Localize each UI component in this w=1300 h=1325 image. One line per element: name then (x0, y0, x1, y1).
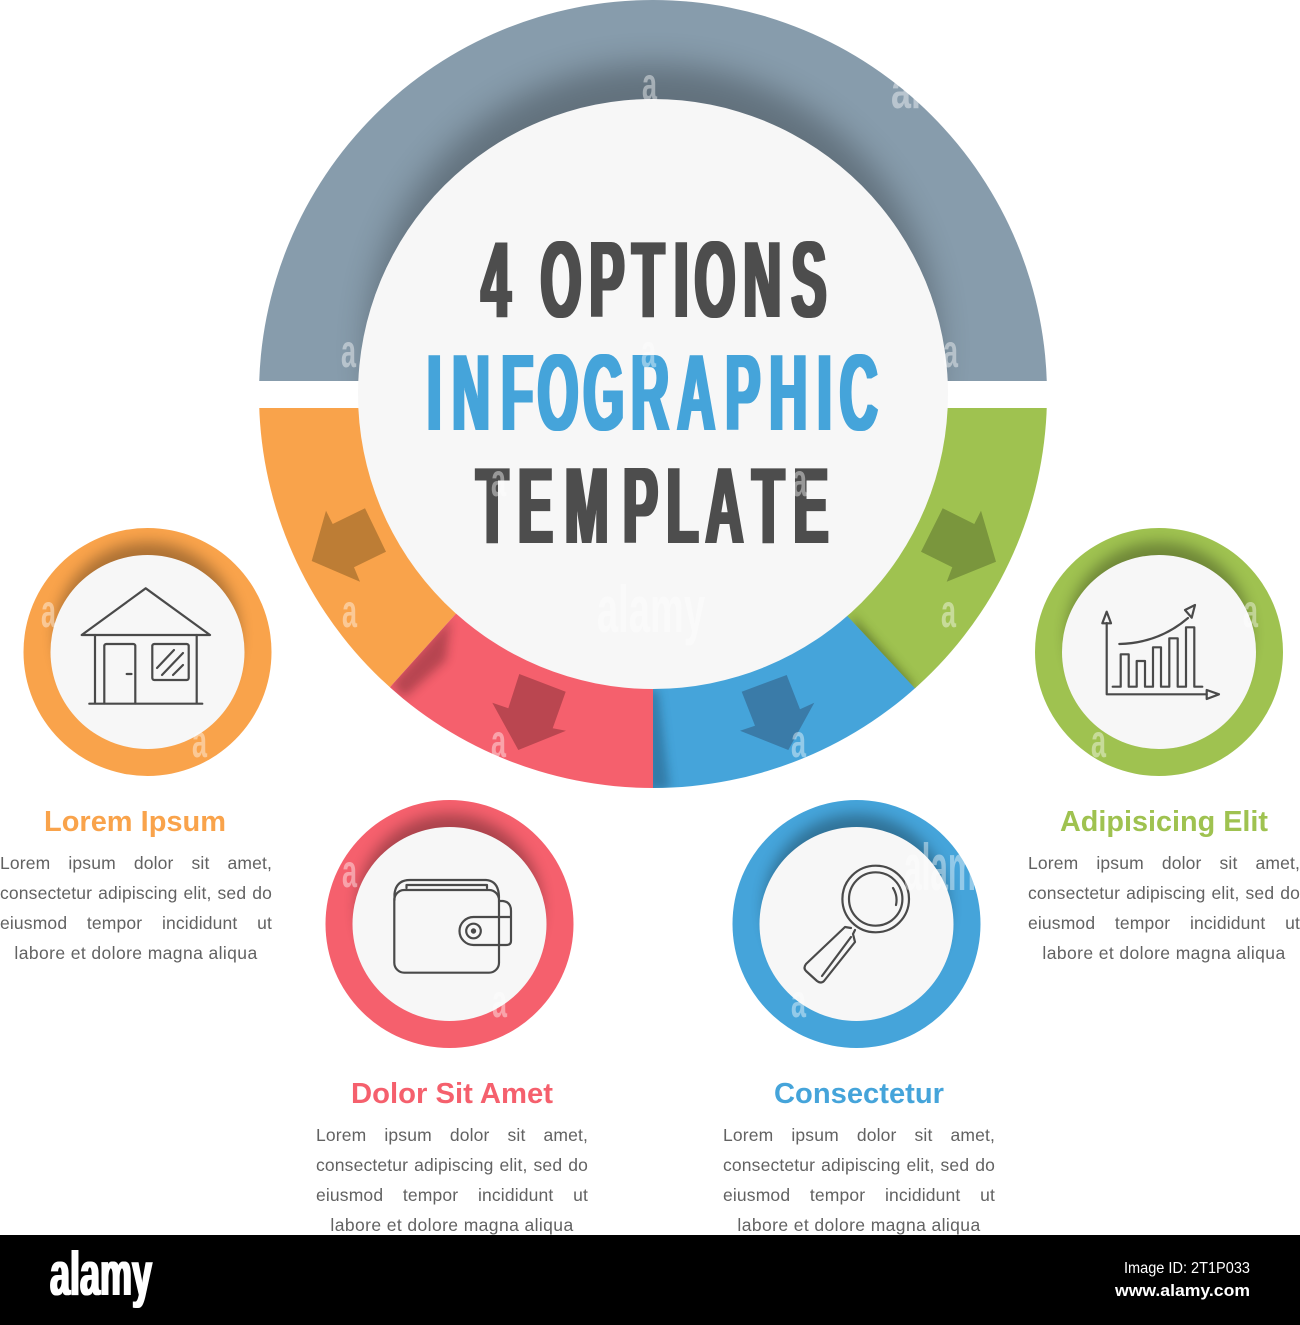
watermarks: a (491, 454, 506, 506)
text block: Lorem ipsum dolor sit amet, (723, 1125, 995, 1145)
red ring (326, 800, 574, 1048)
website: www.alamy.com (1114, 1281, 1250, 1300)
arrow: blue (740, 675, 814, 750)
footer bar (0, 1235, 1300, 1325)
watermarks: a (642, 58, 657, 110)
text block: consectetur adipiscing elit, sed do (0, 883, 272, 903)
text block: consectetur adipiscing elit, sed do (1028, 883, 1300, 903)
icon: house (82, 588, 210, 704)
watermarks: alam (904, 830, 976, 904)
title: INFOGRAPHIC (427, 333, 878, 454)
text block (0, 853, 272, 963)
arrow: green (921, 508, 996, 582)
option: Adipisicing Elit (1028, 528, 1300, 963)
watermarks: a (792, 454, 807, 506)
watermarks: a (341, 325, 356, 377)
watermarks: a (491, 715, 506, 767)
text block: consectetur adipiscing elit, sed do (316, 1155, 588, 1175)
top gray arc (259, 0, 1047, 381)
text block (316, 1125, 588, 1235)
watermarks: a (1091, 715, 1106, 767)
text block: labore et dolore magna aliqua (1042, 943, 1286, 963)
text block (1028, 853, 1300, 963)
text block: eiusmod tempor incididunt ut (0, 913, 272, 933)
watermarks: a (791, 975, 806, 1027)
blue segment (653, 616, 916, 788)
alamy logo: alamy (50, 1240, 152, 1309)
arrow: red (492, 674, 566, 750)
text block: labore et dolore magna aliqua (330, 1215, 574, 1235)
watermarks: a (941, 585, 956, 637)
option: Lorem Ipsum (0, 528, 272, 963)
icon: growth chart (1102, 605, 1219, 699)
watermarks: a (641, 325, 656, 377)
title: 4 OPTIONS (481, 220, 826, 341)
watermarks: a (943, 325, 958, 377)
icon: wallet (394, 880, 511, 973)
text block: eiusmod tempor incididunt ut (316, 1185, 588, 1205)
center circle (358, 99, 948, 689)
green ring (1035, 528, 1283, 776)
watermarks: alamy (597, 572, 705, 646)
green segment (847, 408, 1047, 688)
text block: Lorem ipsum dolor sit amet, (0, 853, 272, 873)
watermarks: a (342, 845, 357, 897)
watermarks: a (342, 585, 357, 637)
red segment (390, 614, 653, 788)
text block: labore et dolore magna aliqua (14, 943, 258, 963)
circular diagram (259, 0, 1047, 788)
title (427, 220, 878, 567)
arrow: orange (312, 508, 386, 582)
heading: Consectetur (774, 1078, 944, 1110)
blue ring (732, 800, 980, 1048)
option: Dolor Sit Amet (316, 800, 588, 1235)
watermarks: a (791, 715, 806, 767)
text block: eiusmod tempor incididunt ut (1028, 913, 1300, 933)
text block: consectetur adipiscing elit, sed do (723, 1155, 995, 1175)
orange ring (24, 528, 272, 776)
text block (723, 1125, 995, 1235)
watermarks: a (41, 585, 56, 637)
watermarks: a (492, 975, 507, 1027)
image id: Image ID: 2T1P033 (1124, 1260, 1250, 1277)
watermarks: a (1243, 585, 1258, 637)
title: TEMPLATE (476, 446, 828, 567)
watermarks: al (891, 62, 921, 120)
heading: Dolor Sit Amet (351, 1078, 553, 1110)
text block: eiusmod tempor incididunt ut (723, 1185, 995, 1205)
icon: magnifying glass (804, 866, 909, 982)
heading: Lorem Ipsum (44, 806, 226, 838)
text block: Lorem ipsum dolor sit amet, (316, 1125, 588, 1145)
watermarks: a (192, 715, 207, 767)
orange segment (259, 408, 456, 688)
text block: labore et dolore magna aliqua (737, 1215, 981, 1235)
option: Consectetur (723, 800, 995, 1235)
heading: Adipisicing Elit (1060, 806, 1268, 838)
text block: Lorem ipsum dolor sit amet, (1028, 853, 1300, 873)
